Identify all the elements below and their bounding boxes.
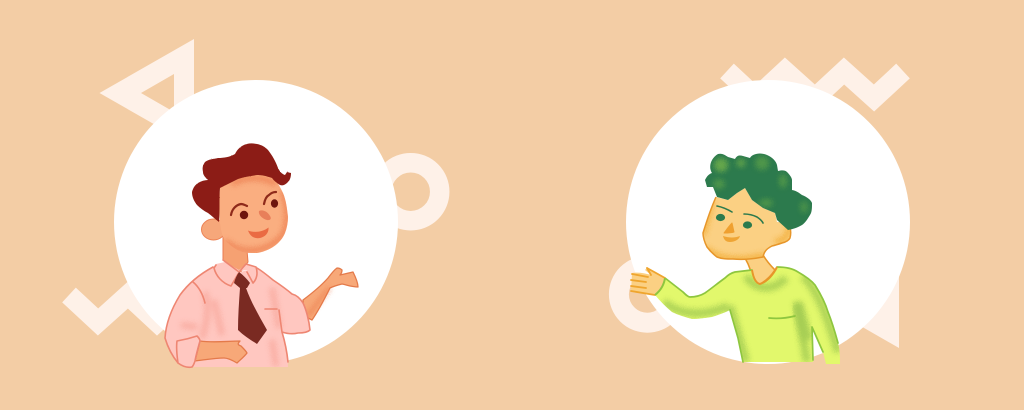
white circle bbox=[114, 80, 398, 364]
head bbox=[703, 188, 791, 259]
eyes and brows bbox=[231, 192, 278, 219]
neck bbox=[745, 255, 775, 285]
resting left arm and hand bbox=[195, 341, 247, 363]
decorative ring bbox=[619, 266, 676, 323]
nose bbox=[259, 210, 271, 220]
collar bbox=[752, 267, 777, 284]
neck bbox=[223, 236, 248, 273]
tie bbox=[234, 272, 267, 344]
rolled cuff bbox=[177, 336, 200, 367]
decorative zigzag bbox=[727, 71, 903, 98]
decorative zigzag bbox=[69, 295, 186, 322]
head bbox=[219, 174, 288, 253]
sweater bbox=[655, 267, 840, 364]
ear bbox=[202, 219, 226, 240]
eyes and brows bbox=[716, 206, 763, 229]
mouth bbox=[723, 236, 740, 242]
raised right arm bbox=[303, 268, 358, 320]
hand bbox=[631, 268, 665, 295]
shirt bbox=[165, 267, 310, 367]
white circle bbox=[626, 80, 910, 364]
nose bbox=[724, 223, 734, 233]
decorative triangle outline bbox=[100, 39, 194, 147]
hair bbox=[705, 154, 812, 230]
sweater cuff bbox=[655, 278, 665, 295]
right scene: boy in green sweater bbox=[619, 71, 910, 364]
character: boy bbox=[631, 154, 840, 364]
character: man bbox=[165, 143, 358, 367]
collar bbox=[214, 260, 257, 286]
hair bbox=[192, 143, 291, 222]
decorative triangle bbox=[805, 240, 899, 348]
decorative ring bbox=[382, 163, 440, 221]
illustration bbox=[62, 39, 910, 368]
left scene: man in pink shirt bbox=[69, 39, 440, 367]
mouth bbox=[248, 228, 269, 238]
